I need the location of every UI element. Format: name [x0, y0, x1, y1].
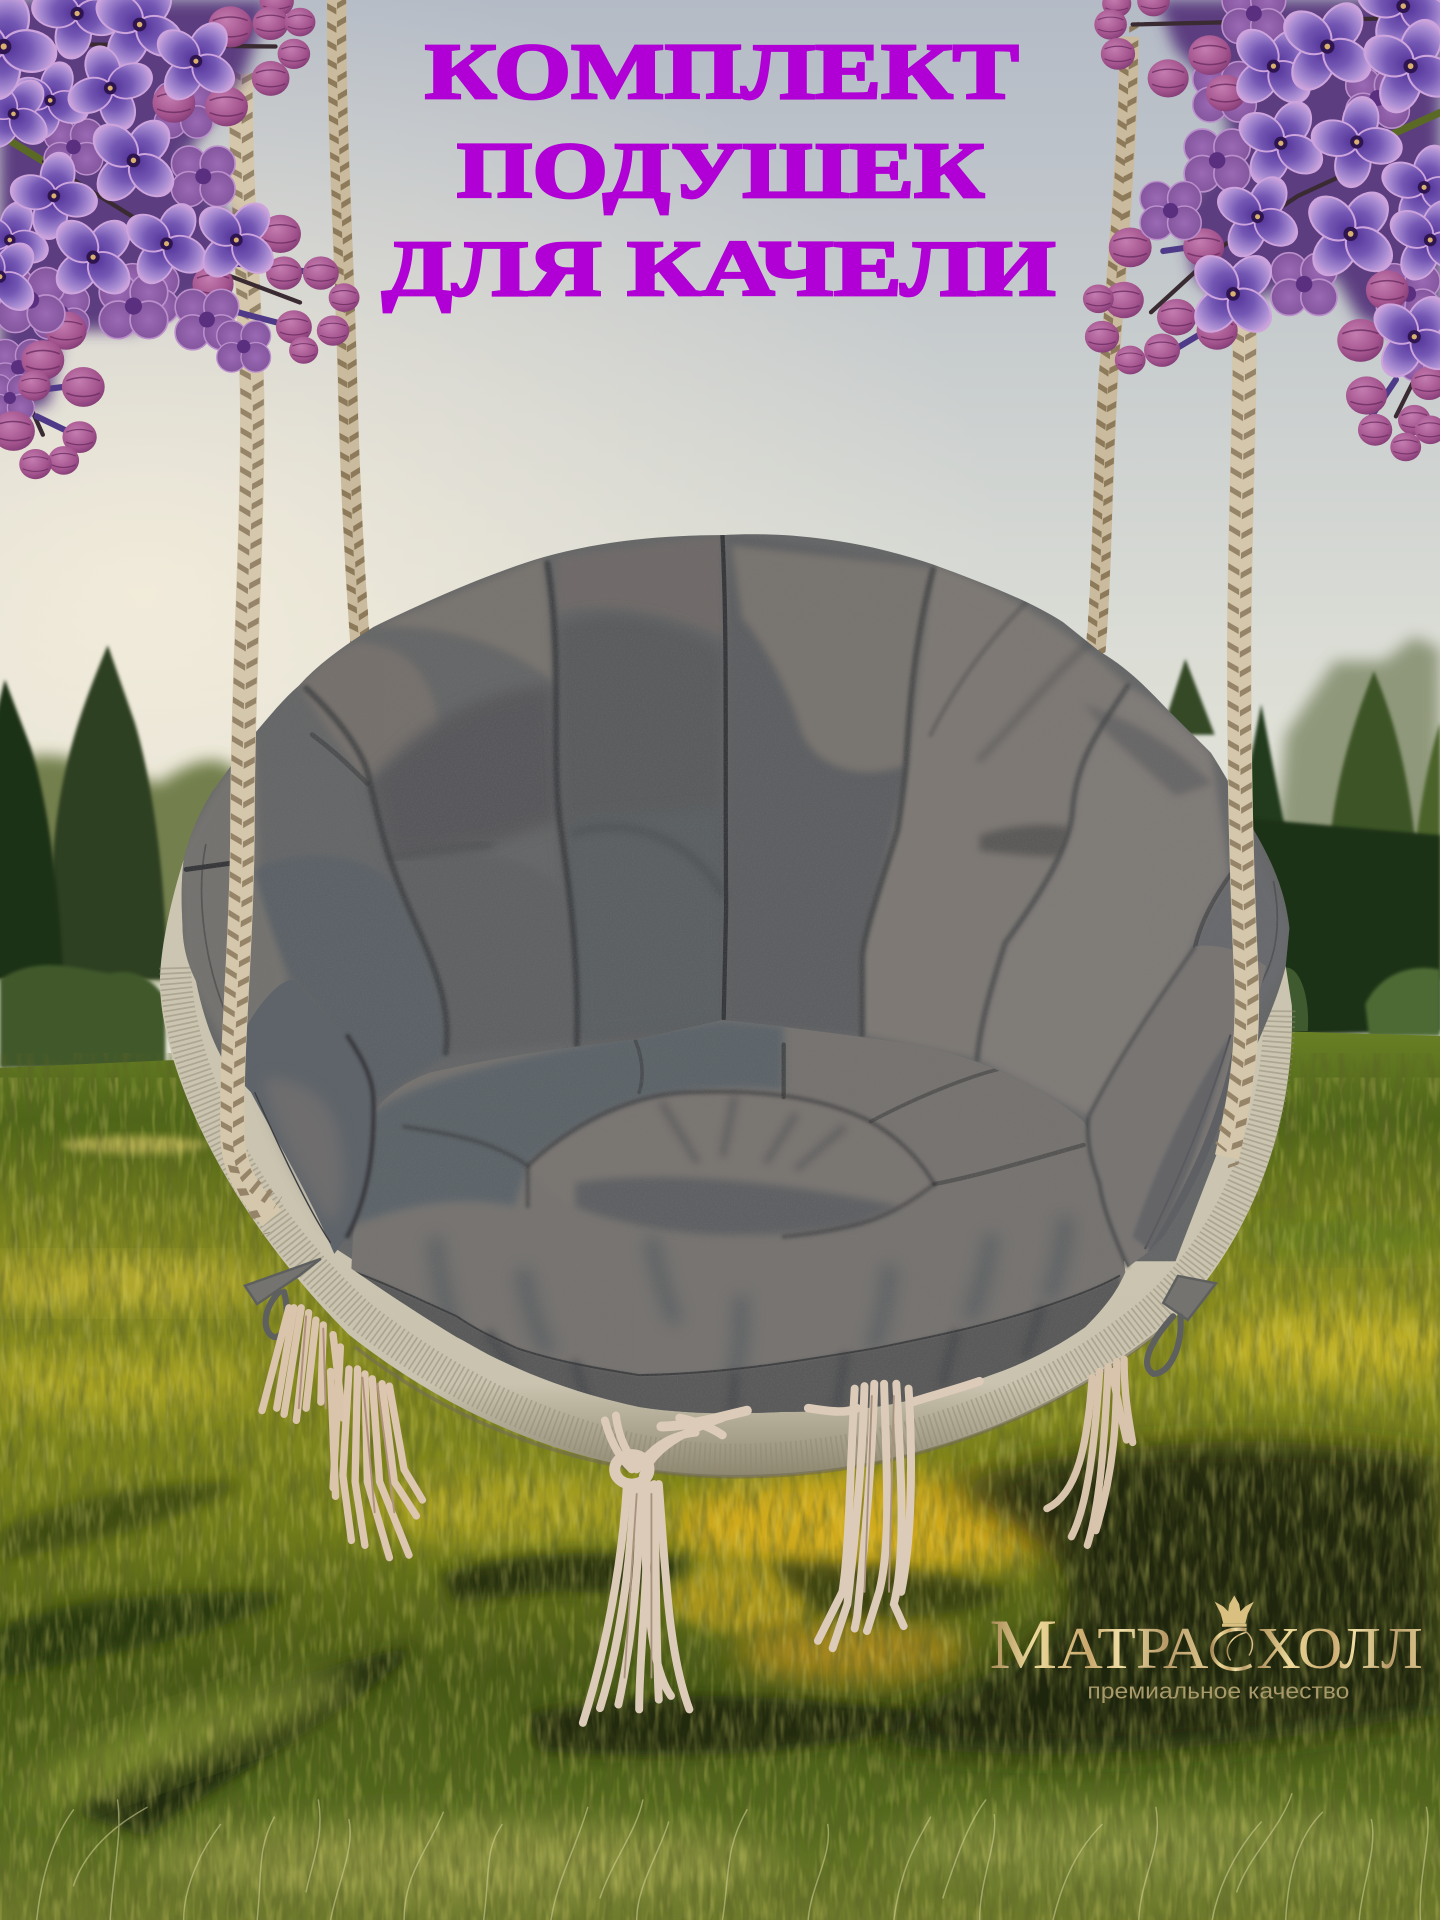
- logo wordmark right: ХОЛЛ: [1256, 1616, 1423, 1681]
- cushion ties: [245, 1259, 1216, 1374]
- seat: inner ring: [536, 1094, 686, 1164]
- back cushion: second panel: [561, 535, 721, 630]
- swing: left side wing: [228, 980, 374, 1254]
- tassel: right centre: [808, 1381, 980, 1648]
- background: sky: [0, 0, 1440, 1078]
- seat: tufting seams: [355, 1041, 1119, 1375]
- back cushion: left band: [182, 768, 286, 1038]
- swing: rim: [160, 860, 1292, 1477]
- back cushion: right panels: [862, 564, 1128, 1059]
- swing: back cushion: [171, 527, 1298, 1286]
- tassel: left outer: [262, 1308, 343, 1496]
- tassel: left inner: [343, 1369, 422, 1558]
- back cushion: creases: [186, 535, 1277, 1059]
- front ropes: [226, 58, 1253, 1234]
- title line 1: КОМПЛЕКТ: [425, 28, 1019, 116]
- background: tree line: [0, 637, 1440, 1068]
- logo tagline: премиальное качество: [1087, 1678, 1349, 1703]
- tassel: right outer: [1047, 1359, 1133, 1545]
- seat: front folds: [436, 1224, 1065, 1378]
- title line 2: ПОДУШЕК: [457, 127, 984, 215]
- back cushion: upper-left panel: [384, 558, 552, 678]
- title line 3: ДЛЯ КАЧЕЛИ: [382, 225, 1056, 313]
- logo crown: [1215, 1596, 1254, 1627]
- swing: right side wing: [1088, 946, 1266, 1267]
- logo wordmark left: МАТРА: [989, 1606, 1209, 1684]
- swing: seat cushion: [351, 1020, 1126, 1414]
- title: [382, 28, 1056, 313]
- back ropes: [332, 0, 1134, 662]
- lilac branch: top right: [1083, 0, 1440, 461]
- back cushion: centre-right panel: [727, 535, 933, 1035]
- tassel: centre knot: [583, 1411, 747, 1723]
- background: lawn: [0, 1031, 1440, 1920]
- logo: [989, 1596, 1423, 1703]
- back cushion: lower lobes: [386, 854, 578, 1056]
- seat: shaded left band: [355, 1020, 784, 1224]
- lilac branch: top left: [0, 0, 360, 479]
- grass blades: [37, 1794, 1428, 1920]
- logo crescent with profile: [1212, 1629, 1252, 1669]
- macrame tassels: [262, 1308, 1133, 1723]
